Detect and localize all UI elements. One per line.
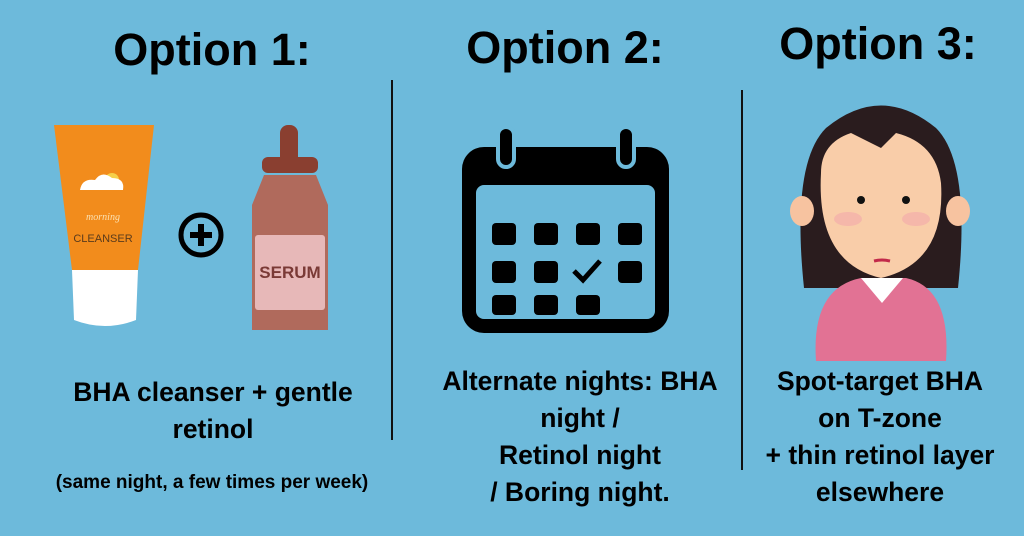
- icon: calendar: [462, 129, 669, 333]
- text: option 1 description: retinol: [172, 414, 253, 444]
- text: option 3 description: [766, 366, 994, 507]
- divider 1: [391, 80, 393, 440]
- icon: cleanser tube: [54, 125, 154, 326]
- icon: plus circle: [178, 212, 224, 258]
- text: option 3 description: on T-zone: [818, 403, 942, 433]
- icon: serum bottle: SERUM: [259, 263, 321, 282]
- text: option 3 description: + thin retinol layer: [766, 440, 994, 470]
- icon: woman: [790, 106, 970, 361]
- text: option 2 description: night /: [540, 403, 620, 433]
- icon: cleanser tube: morning: [86, 212, 120, 223]
- text: option 3 description: elsewhere: [816, 477, 944, 507]
- icon: cleanser tube: CLEANSER: [73, 233, 133, 245]
- text: option 1 description: [73, 377, 353, 444]
- text: option 3 description: Spot-target BHA: [777, 366, 983, 396]
- text: option 2 description: Retinol night: [499, 440, 661, 470]
- text: option 1 description: BHA cleanser + gentle: [73, 377, 353, 407]
- title: option 2: Option 2:: [466, 22, 664, 73]
- text: option 2 description: Alternate nights: BHA: [442, 366, 718, 396]
- text: option 2 description: [442, 366, 718, 507]
- text: option 2 description: / Boring night.: [490, 477, 670, 507]
- divider 2: [741, 90, 743, 470]
- icon: serum bottle: [252, 125, 328, 330]
- text: option 1 note: (same night, a few times per week): [56, 472, 368, 493]
- title: option 1: Option 1:: [113, 24, 311, 75]
- title: option 3: Option 3:: [779, 18, 977, 69]
